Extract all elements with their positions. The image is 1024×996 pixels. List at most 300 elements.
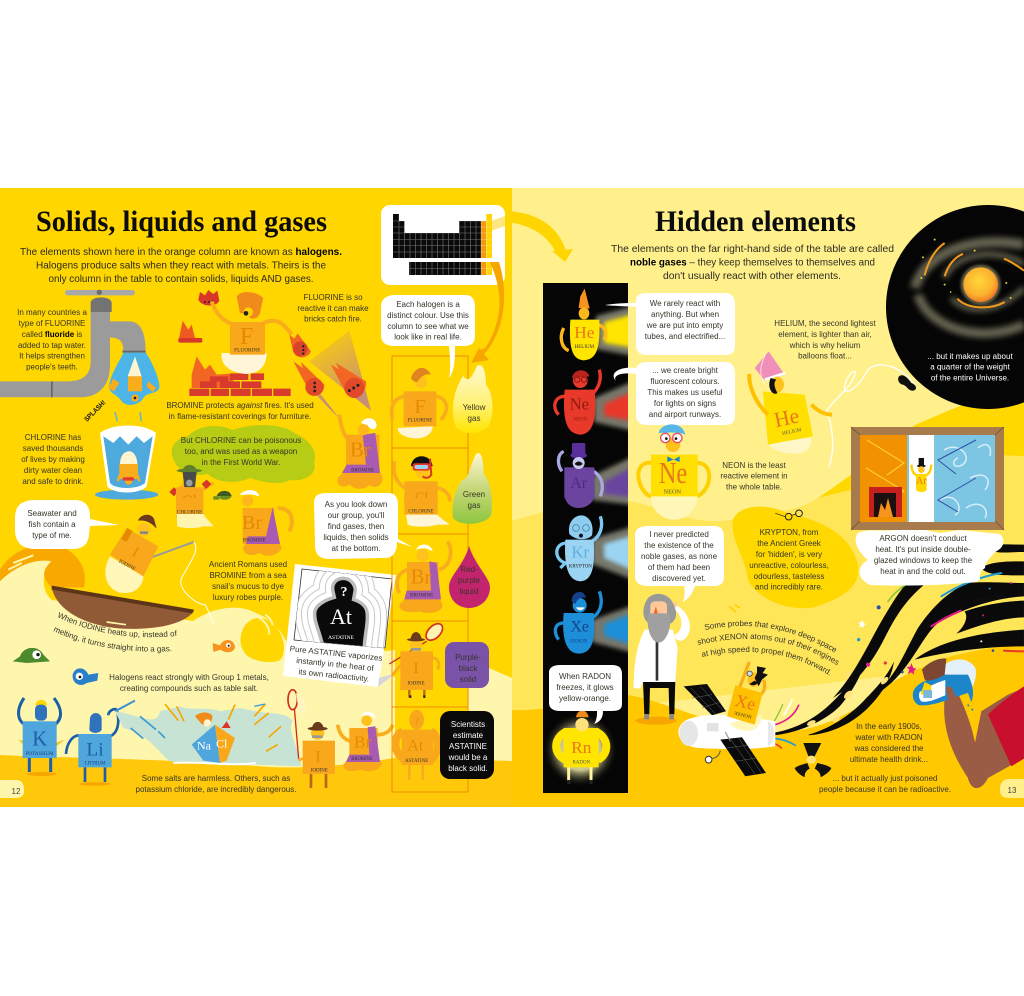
orange breaking wave: [0, 544, 85, 587]
pale yellow ground: [512, 188, 1024, 732]
text: argon: glazed windows to keep the: [874, 556, 973, 565]
polaroid caption: instantly in the heat of: [296, 656, 375, 673]
character: bromine in middle: BROMINE: [243, 538, 266, 543]
text: fluorine reactive: reactive it can make: [297, 304, 369, 313]
text: each halogen: column to see what we: [387, 322, 469, 331]
label: red-purple liquid: purple: [458, 576, 481, 585]
character: xenon in strip: XENON: [570, 639, 588, 644]
text: krypton: unreactive, colourless,: [749, 561, 829, 570]
character: iodine fishing on boat: [52, 515, 213, 629]
fish: blue: [73, 668, 98, 685]
forearm: [944, 695, 985, 788]
character: bromine waving: BROMINE: [351, 757, 373, 762]
character: radon glowing: Rn: [571, 738, 592, 757]
bubble: as you look down: [314, 493, 412, 559]
text: mendeleev speech: I never predicted: [649, 530, 709, 539]
body: [678, 715, 775, 749]
intro text: The elements shown here in the orange column are known as halogens.: [20, 247, 343, 258]
text: radon poison: ... but it actually just poisoned: [833, 774, 937, 783]
curved text: iodine sublimes: When IODINE heats up, instead of: [58, 612, 177, 638]
text: roman purple: luxury robes purple.: [213, 593, 283, 602]
character: lithium: Li: [86, 739, 104, 760]
fireball 2: [293, 361, 324, 396]
text: salts harmless: potassium chloride, are incredibly dangerous.: [136, 785, 296, 794]
label: astatine black solid: black solid.: [448, 764, 488, 773]
box: black solid: [440, 711, 494, 779]
character: argon in strip: Ar: [570, 475, 588, 492]
column character: bromine: BROMINE: [410, 593, 433, 598]
icon: tap pouring water: [0, 290, 159, 421]
curved text: xenon probes: [698, 620, 839, 676]
title: hidden elements: Hidden elements: [655, 205, 856, 238]
column character: chlorine: Cl: [415, 490, 428, 505]
text: fluorine reactive: bricks catch fire.: [304, 314, 362, 324]
text: argon: heat. It's put inside double-: [875, 545, 971, 554]
text: group 1 metals: Halogens react strongly with Group 1 metals,: [109, 673, 269, 682]
character: helium in strip: [561, 289, 606, 360]
text: helium lighter: which is why helium: [789, 341, 861, 350]
text: rarely react: We rarely react with: [650, 299, 720, 308]
argon lower body: [564, 495, 594, 508]
column character: astatine mystery: ?: [414, 717, 419, 728]
column character: chlorine: [394, 456, 450, 505]
text: chlorine saves lives: dirty water clean: [24, 466, 82, 475]
text: krypton: for 'hidden', is very: [756, 550, 822, 559]
bubble: seawater: [15, 500, 119, 549]
text: fluorine reactive: FLUORINE is so: [303, 293, 363, 302]
icon: radiation symbol: [795, 743, 831, 777]
text: radon health drink: water with RADON: [854, 733, 923, 742]
balloon string and knot: [826, 365, 915, 467]
black silhouette: [317, 581, 365, 650]
character: helium with balloon: He: [772, 403, 801, 432]
page number 12: 12: [12, 787, 21, 796]
text: radon freezes: yellow-orange.: [559, 694, 611, 703]
deep yellow ground: [512, 644, 1024, 807]
pale blue splash right part: [254, 704, 301, 766]
icon: glasses: [775, 510, 802, 520]
blob: green gas: [452, 453, 492, 524]
character: mendeleev: [634, 594, 690, 725]
character: iodine fishing on boat: I: [129, 544, 142, 561]
text: radon freezes: When RADON: [559, 672, 611, 681]
character: sodium chloride pair: Na: [197, 739, 212, 753]
callout: astatine polaroid: [283, 564, 396, 687]
whoosh streams: [772, 544, 1024, 748]
curved text: iodine sublimes: melting, it turns straight into a gas.: [54, 627, 172, 654]
small fire in hand: [198, 290, 219, 306]
page number tab 12: [0, 780, 24, 798]
character: krypton in strip: Kr: [572, 542, 590, 561]
text: chlorine saves lives: saved thousands: [23, 444, 83, 453]
text: krypton: odourless, tasteless: [754, 572, 824, 581]
panel lower: [720, 737, 766, 776]
fireball 1: [289, 333, 311, 357]
text: krypton: KRYPTON, from: [760, 528, 819, 537]
chlorine column body lower: CHLORINE: [408, 510, 434, 515]
character: big neon: [638, 424, 709, 498]
text: neon least reactive: reactive element in: [720, 472, 788, 480]
text: rarely react: we are put into empty: [646, 321, 723, 330]
character: chlorine with gas mask: [169, 465, 232, 517]
text: each halogen: Each halogen is a: [396, 300, 460, 309]
character: argon in strip: [558, 443, 602, 498]
splash label: SPLASH!: [83, 399, 108, 423]
character: sodium chloride pair: Cl: [216, 736, 228, 750]
halogen and noble gas columns: [481, 221, 486, 275]
character: neon in strip: [555, 370, 600, 435]
text: seawater: fish contain a: [28, 520, 76, 529]
curved text: xenon probes: Some probes that explore deep space: [704, 620, 836, 652]
coloured speed streaks: [772, 573, 1024, 748]
thruster dish: [705, 751, 720, 763]
character: helium with balloon: HELIUM: [782, 428, 802, 437]
boat: [52, 587, 194, 629]
character: lithium: [66, 701, 135, 786]
text: roman purple: BROMINE from a sea: [209, 571, 287, 580]
astatine name: ASTATINE: [328, 635, 355, 641]
red sleeve: [988, 686, 1024, 766]
character: potassium: K: [32, 728, 47, 750]
text: argon: ARGON doesn't conduct: [879, 534, 967, 543]
bubble: each halogen: [381, 295, 475, 378]
bulb: [105, 556, 143, 593]
text: chlorine poison: in the First World War.: [202, 458, 280, 467]
strong yellow hill near window: [818, 402, 1024, 498]
character: helium in strip: He: [574, 323, 595, 342]
character: bromine under fire: [337, 415, 382, 489]
bubble: we create bright: [614, 362, 735, 425]
text: radon poison: people because it can be radioactive.: [819, 785, 951, 794]
text: salts harmless: Some salts are harmless. Others, such as: [142, 774, 290, 783]
blob: krypton: [733, 507, 858, 608]
text: helium lighter: balloons float...: [798, 352, 852, 360]
text: fluoride: It helps strengthen: [19, 352, 85, 360]
whoosh label: WHOOSH!: [972, 591, 1006, 606]
character: bromine under fire: BROMINE: [351, 469, 374, 474]
splash from sodium chloride reaction: [115, 704, 256, 765]
column character: bromine: Br: [411, 566, 431, 588]
text: create bright: for lights on signs: [654, 399, 716, 408]
label: red-purple liquid: Red-: [460, 565, 478, 574]
callout: chlorine poison cloud: [172, 425, 315, 483]
text: create bright: This makes us useful: [647, 388, 723, 397]
label: astatine black solid: would be a: [448, 753, 488, 762]
column character: fluorine: [392, 368, 446, 438]
beams of light: [592, 306, 634, 653]
text: create bright: ... we create bright: [652, 366, 719, 375]
upper arm: [968, 688, 1024, 788]
text: fluoride: In many countries a: [17, 308, 87, 317]
right page: Hidden elements: [512, 188, 1024, 807]
cold rays: [938, 440, 976, 512]
label: astatine black solid: Scientists: [451, 720, 485, 729]
character: fluorine with fire: FLUORINE: [234, 348, 260, 354]
warm rays: [866, 440, 904, 500]
fireball 3: [331, 363, 366, 398]
character: radon glowing: [546, 711, 614, 784]
arm pouring radon water: [913, 658, 1024, 788]
text: chlorine poison: too, and was used as a weapon: [185, 447, 297, 456]
argon gap: [909, 435, 934, 522]
grey halo of beams: [592, 306, 634, 653]
arrow: table to halogen column: [471, 262, 504, 363]
character: helium in strip: HELIUM: [575, 345, 595, 350]
trails: [309, 331, 371, 411]
character: iodine with butterfly net: I: [315, 748, 321, 765]
text: helium lighter: element, is lighter than air,: [778, 330, 872, 339]
character: iodine with butterfly net: IODINE: [311, 768, 328, 773]
satellite with xenon rider: XENON: [734, 712, 752, 721]
text: seawater: Seawater and: [27, 509, 77, 518]
blob: yellow gas: [453, 365, 492, 433]
bubble: radon: [549, 665, 622, 724]
curved text: xenon probes: at high speed to propel them forward.: [702, 646, 830, 676]
character: krypton in strip: [557, 515, 602, 581]
bubble: never predicted: [635, 526, 724, 602]
wind swirls: [940, 445, 990, 518]
question mark: ?: [340, 585, 348, 600]
curved text: xenon probes: shoot XENON atoms out of their engines: [698, 633, 839, 665]
intro text noble gases: The elements on the far right-hand side of the table are called: [611, 244, 894, 255]
text: neon least reactive: NEON is the least: [722, 461, 787, 470]
page number tab 13: [1000, 779, 1024, 798]
warm pane: [860, 435, 907, 522]
pale sea: [0, 559, 395, 770]
intro text noble gases: don't usually react with other elements.: [663, 271, 841, 282]
text: radon health drink: In the early 1900s,: [856, 722, 922, 731]
text: argon: heat in and the cold out.: [880, 567, 966, 576]
polaroid caption: Pure ASTATINE vaporizes: [289, 644, 383, 663]
text: chlorine saves lives: of lives by making: [21, 455, 85, 464]
fishing rod and line: [143, 542, 194, 560]
fireballs falling on bromine: [289, 331, 371, 419]
argon figure: Ar: [916, 476, 927, 487]
tilted card: [110, 528, 158, 576]
text: radon freezes: freezes, it glows: [556, 683, 614, 692]
helium raised arm: [749, 355, 768, 415]
character: bromine in middle: [239, 490, 292, 556]
character: neon in strip: Ne: [570, 395, 589, 414]
character: helium with balloon: [755, 351, 916, 467]
black trousers: [643, 681, 675, 715]
character: neon in strip: NEON: [573, 418, 588, 423]
text: group 1 metals: creating compounds such as table salt.: [120, 684, 258, 693]
text: universe: a quarter of the weight: [930, 362, 1011, 372]
text: krypton: and incredibly rare.: [755, 582, 823, 592]
character: chlorine with gas mask: Cl: [181, 491, 198, 510]
text: chlorine saves lives: and safe to drink.: [22, 477, 84, 486]
text: fluoride: people's teeth.: [26, 362, 78, 372]
label: purple-black solid: Purple-: [455, 653, 481, 662]
white lab coat: [634, 630, 678, 689]
text: each halogen: look like in real life.: [394, 332, 462, 342]
panel: universe with galaxy: [886, 205, 1024, 409]
tiny radon figure: [921, 682, 931, 697]
box: purple-black solid: [445, 642, 489, 688]
At symbol: At: [330, 604, 352, 629]
text: helium lighter: HELIUM, the second lightest: [774, 319, 876, 328]
galaxy: [915, 239, 1024, 333]
character: radon glowing: RADON: [572, 760, 591, 765]
big neon lower bowl: [651, 496, 698, 520]
text: mendeleev speech: discovered yet.: [652, 574, 706, 583]
contour rings around silhouette: [317, 581, 365, 650]
title: solids, liquids and gases: Solids, liquids and gases: [36, 205, 327, 238]
text: look down group: find gases, then: [328, 522, 384, 531]
pale sea right of column: [468, 660, 512, 765]
text: seawater: type of me.: [32, 531, 72, 540]
label: yellow gas: Yellow: [463, 403, 486, 412]
satellite with xenon rider: [678, 605, 775, 776]
sand band: [0, 755, 512, 807]
page number 13: 13: [1008, 786, 1017, 795]
column character: astatine mystery: [395, 710, 438, 780]
polaroid card: [283, 564, 396, 687]
left page: Solids, liquids and gases: [0, 188, 512, 807]
black element cells: [393, 214, 481, 275]
text: look down group: liquids, then solids: [323, 533, 389, 542]
text: roman purple: Ancient Romans used: [209, 560, 287, 569]
character: xenon in strip: Xe: [570, 618, 589, 635]
polaroid caption: its own radioactivity.: [298, 667, 370, 684]
label: red-purple liquid: liquid: [460, 587, 478, 596]
text: look down group: our group, you'll: [328, 511, 385, 520]
text: neon least reactive: the whole table.: [726, 482, 782, 492]
black circle: [886, 205, 1024, 409]
column character: iodine with net: IODINE: [407, 682, 425, 687]
intro text: Halogens produce salts when they react with metals. Theirs is the: [36, 260, 326, 272]
text: roman purple: snail's mucus to dye: [212, 582, 284, 591]
column character: iodine with net: [389, 621, 446, 698]
text: rarely react: tubes, and electrified...: [645, 332, 725, 341]
left page yellow ground: [0, 188, 512, 807]
chlorine column body lower: [404, 498, 449, 527]
strip: noble gases in black: [543, 283, 628, 793]
character: bromine waving: Br: [354, 732, 372, 751]
label: green gas: gas: [468, 501, 480, 510]
text: radon health drink: ultimate health drink...: [850, 755, 928, 764]
beaker: [913, 659, 976, 705]
text: mendeleev speech: the existence of the: [644, 541, 714, 550]
text: mendeleev speech: of them had been: [648, 563, 710, 572]
tiny gas figures: [806, 670, 890, 727]
fish: orange: [213, 640, 235, 652]
text: fluoride: added to tap water.: [18, 341, 86, 350]
argon figure: [911, 458, 931, 492]
satellite with xenon rider: Xe: [733, 691, 758, 714]
character: lithium: LITHIUM: [84, 761, 106, 766]
label: astatine black solid: estimate: [453, 731, 484, 740]
blob: red-purple liquid: [449, 546, 490, 608]
character: bromine waving: [338, 712, 393, 771]
fluorine bulb, card, head: [221, 353, 267, 374]
panel: double-glazed window: [851, 427, 1004, 530]
helium arm right: [811, 405, 832, 415]
text: each halogen: distinct colour. Use this: [387, 311, 469, 320]
intro text noble gases: noble gases – they keep themselves to themselves and: [630, 258, 882, 268]
character: xenon in strip: [555, 591, 601, 654]
panel upper: [684, 684, 726, 715]
text: bromine protects: in flame-resistant coverings for furniture.: [169, 412, 311, 421]
column character: fluorine: F: [414, 396, 426, 418]
curved text: iodine sublimes: [54, 612, 177, 654]
icon: glass of water with chlorine: [95, 425, 158, 500]
character: big neon: NEON: [664, 489, 682, 496]
hand: [922, 658, 946, 681]
cloud: argon caption: [856, 530, 1003, 586]
text: create bright: and airport runways.: [649, 410, 721, 419]
text: krypton: the Ancient Greek: [757, 539, 822, 548]
text: look down group: As you look down: [325, 500, 387, 509]
text: fluoride: called fluoride is: [22, 330, 82, 339]
intro text: only column in the table to contain solids, liquids AND gases.: [48, 274, 314, 285]
chlorine lower body: CHLORINE: [177, 510, 202, 515]
yellow wave curl: [240, 615, 284, 662]
text: mendeleev speech: noble gases, as none: [641, 552, 718, 561]
stars and sparks: [857, 582, 1012, 675]
text: rarely react: anything. But when: [651, 310, 719, 319]
character: iodine fishing on boat: IODINE: [118, 558, 137, 572]
satellite nozzle end: [768, 721, 774, 746]
character: bromine under fire: Br: [350, 440, 371, 462]
label: purple-black solid: solid: [460, 675, 476, 684]
character: krypton in strip: KRYPTON: [569, 564, 592, 569]
coloured beams: [604, 314, 634, 645]
text: chlorine poison: But CHLORINE can be poisonous: [181, 436, 301, 445]
column character: fluorine: FLUORINE: [408, 418, 432, 423]
character: potassium: [18, 698, 65, 776]
halogen column table: [392, 356, 468, 792]
chlorine lower body: [176, 498, 213, 528]
mid yellow ground: [512, 424, 1024, 710]
party hat: [755, 351, 785, 381]
label: purple-black solid: black: [459, 664, 478, 673]
character: fluorine with fire: F: [240, 324, 253, 350]
xenon rider: [730, 715, 761, 731]
text: universe: of the entire Universe.: [931, 374, 1009, 382]
text: universe: ... but it makes up about: [927, 352, 1013, 361]
burning brick stack: [178, 321, 291, 396]
text: chlorine saves lives: CHLORINE has: [25, 433, 81, 442]
brown frame: [851, 427, 1004, 530]
arrow: table to noble gases: [512, 211, 573, 262]
table card: [381, 205, 505, 285]
icon: periodic table: [381, 205, 505, 285]
character: sodium chloride pair: [192, 713, 235, 763]
fireplace: [869, 487, 902, 517]
label: green gas: Green: [463, 490, 485, 499]
helium bulb: [768, 438, 811, 454]
character: big neon: Ne: [659, 456, 687, 490]
text: look down group: at the bottom.: [332, 544, 380, 553]
column character: iodine with net: I: [413, 660, 419, 677]
column character: astatine mystery: At: [407, 738, 424, 755]
bubble: we rarely react: [605, 293, 735, 355]
photo frame: [294, 569, 392, 648]
cold pane: [936, 435, 995, 522]
text: radon health drink: was considered the: [854, 744, 924, 753]
character: potassium: POTASSIUM: [26, 752, 54, 757]
label: astatine black solid: ASTATINE: [449, 742, 487, 751]
label: yellow gas: gas: [468, 414, 480, 423]
text: create bright: fluorescent colours.: [650, 377, 720, 386]
column character: astatine mystery: ASTATINE: [405, 759, 428, 764]
fish: green: [13, 648, 50, 663]
character: iodine with butterfly net: [288, 690, 335, 788]
character: fluorine with fire: [178, 290, 292, 396]
text: bromine protects: BROMINE protects against fires. It's used: [166, 401, 314, 410]
